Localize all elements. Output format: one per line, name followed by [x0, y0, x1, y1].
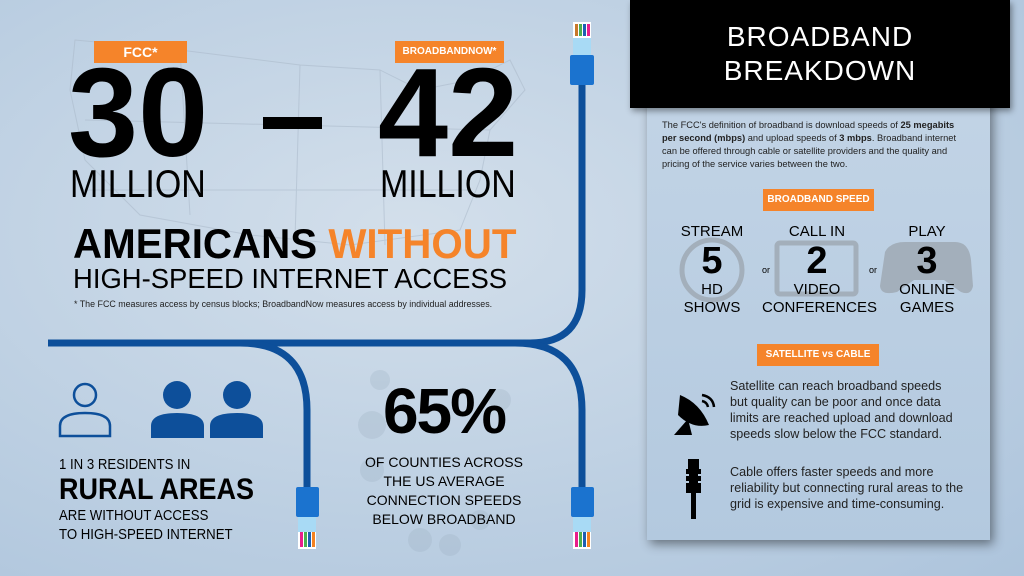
text: rural — [59, 456, 254, 543]
connector right — [571, 487, 594, 549]
panel: broadband breakdown: CONFERENCES — [762, 299, 877, 316]
footnote: * The FCC measures access by census blocks; BroadbandNow measures access by individual addresses. — [74, 299, 492, 309]
cable text: reliability but connecting rural areas to the — [730, 481, 963, 495]
tag broadband speed: BROADBAND SPEED — [767, 194, 870, 205]
panel: broadband breakdown: or — [869, 265, 877, 275]
intro text — [662, 120, 956, 169]
intro text: The FCC's definition of broadband is download speeds of 25 megabits — [662, 120, 954, 130]
satellite text: but quality can be poor and once data — [730, 395, 941, 409]
dots bg for 65% — [358, 370, 511, 556]
text: 65%: CONNECTION SPEEDS — [367, 492, 521, 508]
icon: people — [58, 381, 263, 438]
panel: broadband breakdown: 3 — [916, 240, 938, 282]
icons backgrounds — [680, 238, 973, 302]
tag broadband speed — [763, 189, 874, 211]
cable text: grid is expensive and time-consuming. — [730, 497, 944, 511]
tag satellite vs cable: SATELLITE vs CABLE — [766, 349, 870, 360]
text: MILLION — [380, 163, 516, 206]
icon: cable — [686, 459, 701, 519]
connector top — [570, 22, 594, 85]
title box: BROADBAND — [727, 21, 913, 52]
title box — [630, 0, 1010, 108]
satellite text — [730, 379, 953, 441]
speed items: SHOWS — [684, 299, 740, 316]
intro text: can be offered through cable or satellite providers and the quality and — [662, 146, 947, 156]
cables — [48, 22, 594, 556]
panel: broadband breakdown: 2 — [806, 240, 828, 282]
satellite text: speeds slow below the FCC standard. — [730, 427, 942, 441]
headline: AMERICANS WITHOUT — [73, 220, 516, 267]
text: rural: 1 IN 3 RESIDENTS IN — [59, 456, 190, 473]
text: 65% — [365, 375, 523, 527]
dash — [263, 117, 322, 129]
title box: BREAKDOWN — [724, 55, 916, 86]
big number 30: 30 — [68, 42, 208, 183]
cable text — [730, 465, 963, 511]
satellite text: Satellite can reach broadband speeds — [730, 379, 941, 393]
subheadline: HIGH-SPEED INTERNET ACCESS — [73, 263, 507, 294]
text: 65%: THE US AVERAGE — [383, 473, 505, 489]
connector left — [296, 487, 319, 549]
intro text: per second (mbps) and upload speeds of 3 mbps. Broadband internet — [662, 133, 956, 143]
speed items: STREAM HD — [681, 223, 743, 298]
tag BroadbandNow — [395, 41, 504, 63]
intro text: pricing of the service varies between the two. — [662, 159, 848, 169]
tag FCC: FCC* — [123, 44, 158, 60]
text: 65%: BELOW BROADBAND — [372, 511, 516, 527]
text: rural: TO HIGH-SPEED INTERNET — [59, 526, 233, 543]
map outline (faint) — [70, 40, 526, 246]
big number 42: 42 — [378, 42, 518, 183]
speed items: 5 — [701, 240, 723, 282]
tag FCC — [94, 41, 187, 63]
text: 65%: 65% — [383, 375, 505, 447]
tag satellite vs cable — [757, 344, 879, 366]
text: rural: ARE WITHOUT ACCESS — [59, 507, 208, 524]
text: rural: RURAL AREAS — [59, 473, 254, 506]
tag BroadbandNow: BROADBANDNOW* — [403, 46, 496, 57]
text: 65%: OF COUNTIES ACROSS — [365, 454, 523, 470]
icon: satellite — [674, 394, 716, 435]
panel: broadband breakdown — [647, 0, 990, 540]
panel: broadband breakdown: GAMES — [900, 299, 954, 316]
satellite text: limits are reached upload and download — [730, 411, 953, 425]
cable text: Cable offers faster speeds and more — [730, 465, 933, 479]
panel: broadband breakdown: CALL IN VIDEO — [789, 223, 845, 298]
panel: broadband breakdown: or — [762, 265, 770, 275]
panel: broadband breakdown: PLAY ONLINE — [899, 223, 955, 298]
million labels: MILLION — [70, 163, 206, 206]
